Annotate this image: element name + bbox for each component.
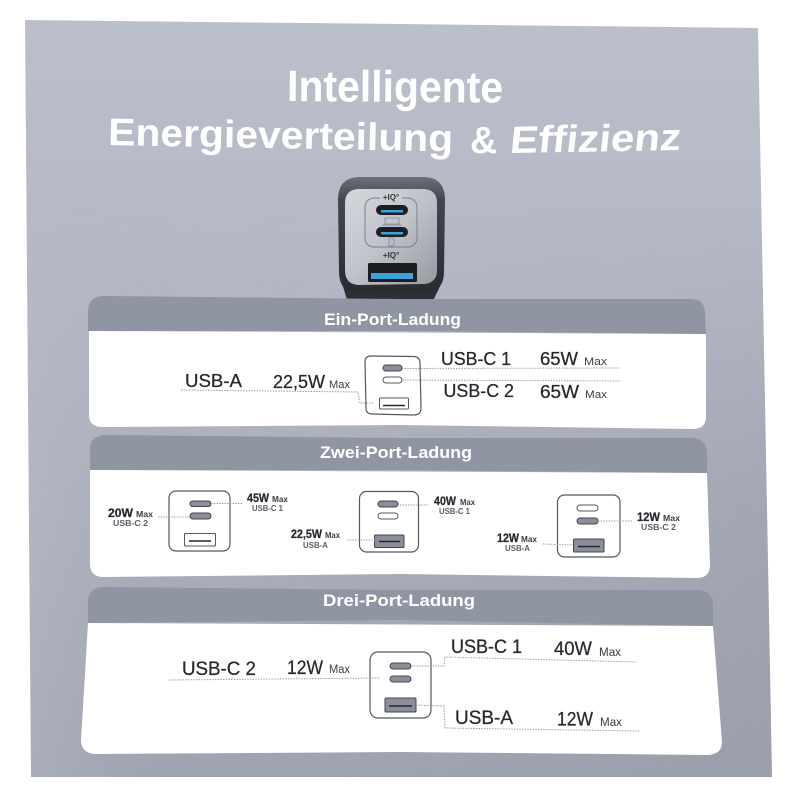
panel: Drei-Port-Ladung [81, 587, 722, 755]
IQ label top [380, 193, 402, 201]
IQ text top: +IQ° [383, 193, 399, 202]
panel body [89, 331, 706, 429]
label USB-C 2: USB-C 2 [113, 518, 148, 528]
leader lines 2 [347, 505, 428, 540]
label 40W Max: Max [460, 497, 475, 507]
title: & [470, 120, 497, 162]
label USB-C 1: USB-C 1 [451, 637, 522, 658]
charger tail [341, 280, 443, 303]
title: Energieverteilung [108, 111, 454, 161]
USB-C port 1 [376, 205, 408, 215]
leader lines 1 [158, 504, 243, 517]
IQ outline [365, 198, 417, 247]
label 12W Max [497, 533, 537, 545]
phone icon [389, 238, 394, 246]
label 65W: 65W [540, 349, 578, 369]
IQ text bottom: +IQ° [383, 251, 399, 260]
charger diagram 3 [558, 495, 620, 557]
label USB-A: USB-A [455, 708, 513, 729]
label 45W Max: 45W [247, 493, 269, 505]
label USB-C 1: USB-C 1 [441, 349, 511, 369]
label 45W Max: Max [272, 494, 288, 504]
charger shell [338, 177, 445, 293]
label USB-C 2: USB-C 2 [444, 381, 514, 401]
heading: Drei-Port-Ladung [323, 591, 475, 610]
charger diagram [365, 356, 421, 415]
laptop icon [382, 218, 402, 225]
label 12W Max: Max [663, 513, 680, 523]
label 12W: 12W [557, 710, 593, 730]
panel header [90, 435, 707, 473]
label USB-C 2: USB-C 2 [182, 659, 256, 680]
label 12W Max: 12W [637, 512, 660, 524]
charger face [345, 189, 437, 285]
label 20W Max: 20W [108, 508, 133, 520]
label 20W Max: Max [136, 509, 153, 519]
heading: Ein-Port-Ladung [324, 310, 461, 329]
label 22,5W Max: Max [325, 530, 340, 540]
label 22,5W Max [291, 529, 340, 541]
label 40W: 40W [554, 639, 592, 660]
title: Effizienz [508, 116, 684, 162]
charger diagram 1 [169, 491, 230, 551]
label Max: Max [584, 356, 608, 368]
label 12W Max: Max [521, 534, 537, 544]
label 20W Max [108, 508, 153, 520]
label 22,5W Max: 22,5W [291, 529, 322, 541]
label 40W Max [434, 496, 475, 508]
label Max: Max [329, 379, 351, 391]
leader lines 3 [543, 521, 632, 545]
label USB-A: USB-A [505, 543, 530, 553]
label USB-A: USB-A [303, 540, 328, 550]
panel: Ein-Port-Ladung [88, 296, 706, 429]
label 22,5W: 22,5W [273, 372, 325, 392]
label 12W Max: 12W [497, 533, 519, 545]
label Max: Max [329, 664, 350, 676]
charger diagram [370, 652, 431, 718]
label Max: Max [600, 717, 622, 729]
leader lines [181, 368, 620, 403]
label 45W Max [247, 493, 288, 505]
background shading [30, 394, 772, 777]
label USB-C 2: USB-C 2 [641, 522, 676, 532]
USB-A port [368, 263, 417, 282]
USB-C port 2 [376, 227, 408, 237]
label 40W Max: 40W [434, 496, 456, 508]
label 12W Max [637, 512, 680, 524]
label 12W: 12W [287, 658, 323, 679]
leader lines [169, 657, 640, 731]
panel body [90, 470, 710, 578]
title: Intelligente [287, 62, 503, 113]
label 65W: 65W [540, 382, 579, 402]
panel header [88, 296, 706, 334]
title [108, 62, 684, 162]
label USB-A: USB-A [185, 371, 242, 391]
heading: Zwei-Port-Ladung [320, 443, 472, 462]
label USB-C 1: USB-C 1 [252, 503, 283, 513]
label USB-C 1: USB-C 1 [439, 506, 470, 516]
label Max: Max [599, 647, 621, 659]
panel header [88, 587, 713, 626]
panel body [81, 623, 722, 755]
charger product photo [338, 177, 445, 303]
charger diagram 2 [360, 492, 418, 552]
label Max: Max [585, 389, 608, 401]
panel: Zwei-Port-Ladung [90, 435, 710, 578]
